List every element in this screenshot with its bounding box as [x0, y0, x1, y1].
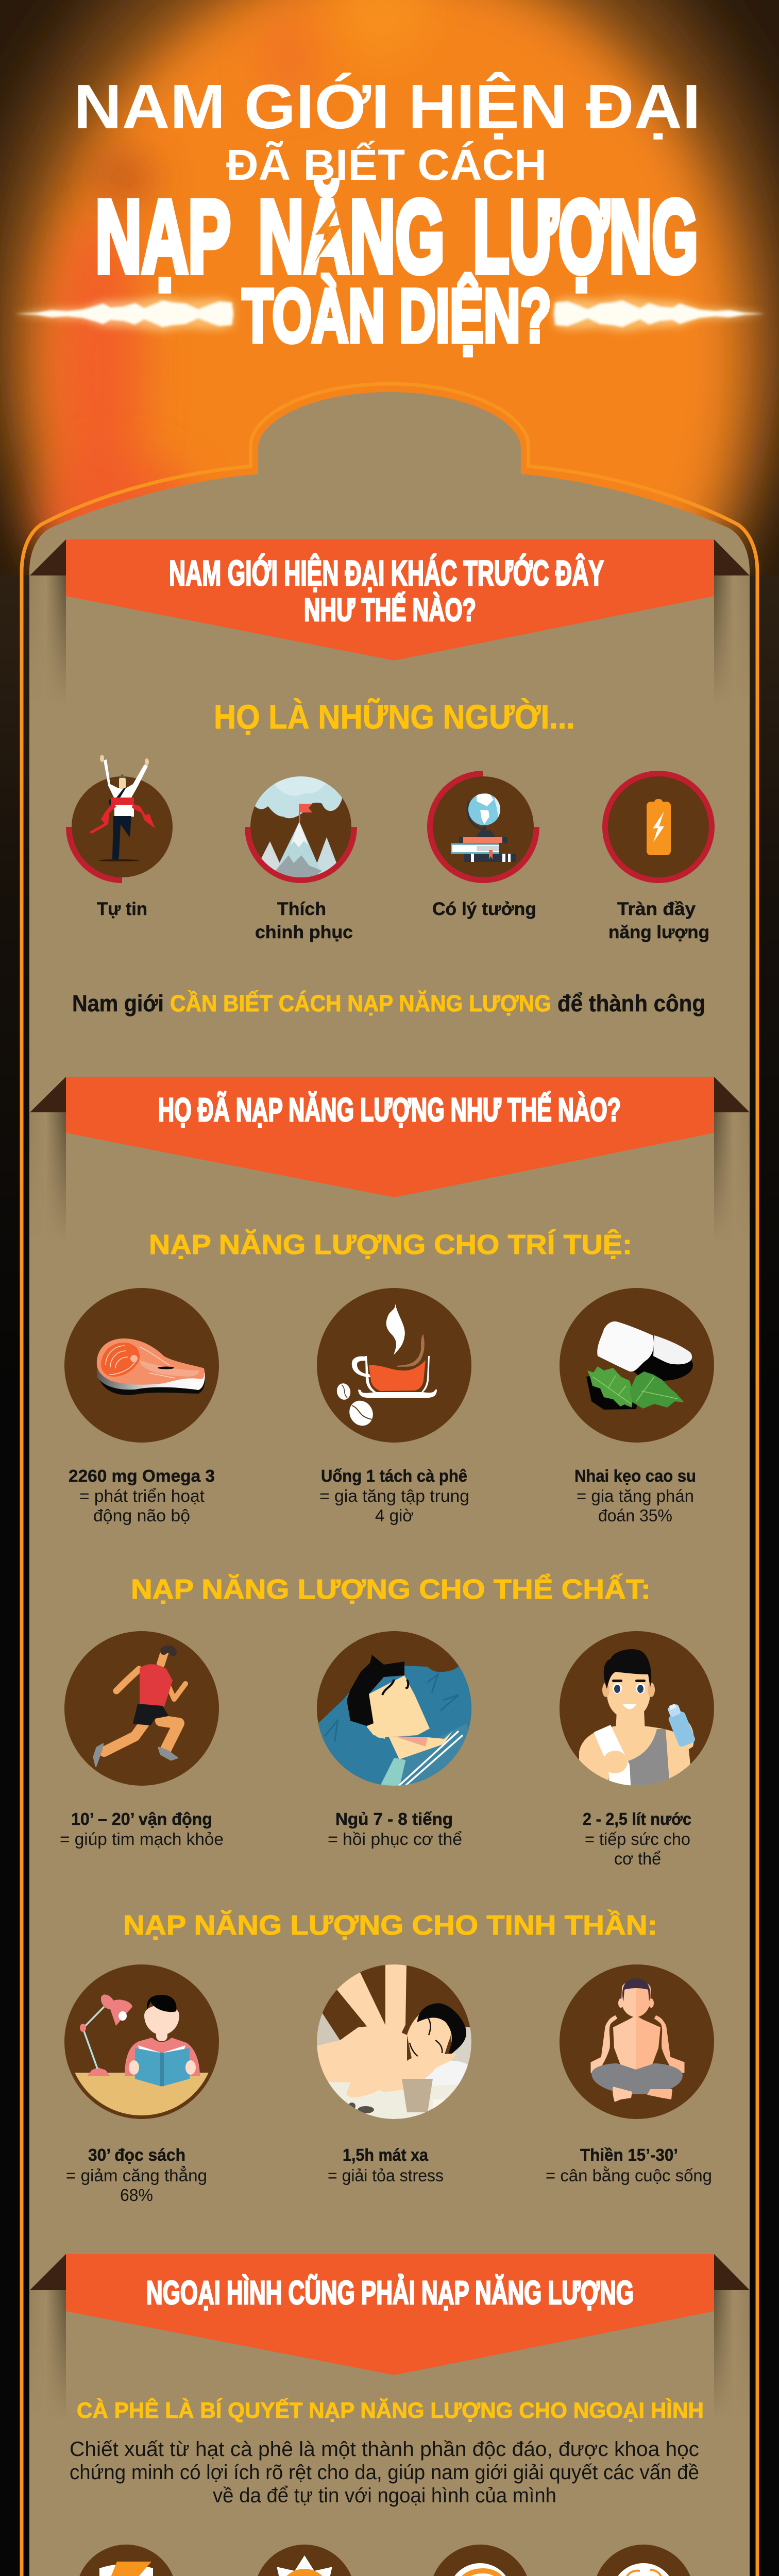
statement: CẦN BIẾT CÁCH NẠP NĂNG LƯỢNG [170, 990, 551, 1016]
title: TOÀN DIỆN? [242, 274, 551, 358]
item text: omega 3: 2260 mg Omega 3 [69, 1466, 215, 1485]
left light flare [15, 296, 233, 331]
item text: coffee [319, 1466, 469, 1525]
item: coffee [317, 1288, 471, 1443]
title: NẠP [95, 179, 231, 294]
title [74, 72, 701, 358]
item text: exercise: 10’ – 20’ vận động [71, 1809, 212, 1828]
item text: water: = tiếp sức cho [585, 1829, 690, 1849]
item text: sleep: = hồi phục cơ thể [328, 1829, 462, 1849]
icon: globe on books [451, 793, 516, 862]
item: massage [314, 1964, 479, 2123]
title: NAM GIỚI HIỆN ĐẠI [74, 72, 701, 142]
section 1 ribbon: NHƯ THẾ NÀO? [304, 592, 476, 628]
icon: coffee cup and beans [335, 1303, 437, 1430]
item text: water: cơ thể [614, 1849, 661, 1868]
statement [72, 990, 705, 1016]
item: exercise [64, 1631, 219, 1786]
paragraph: coffee extract: Chiết xuất từ hạt cà phê là một thành phần độc đáo, được khoa học [70, 2438, 699, 2461]
title: NĂNG [258, 179, 445, 294]
icon: man with water bottle [579, 1649, 696, 1793]
statement: để thành công [557, 990, 705, 1016]
item text: meditation [546, 2145, 712, 2185]
subheading: physical: NẠP NĂNG LƯỢNG CHO THỂ CHẤT: [131, 1574, 651, 1605]
item text: reading [66, 2145, 207, 2205]
icon: gauge [456, 2571, 507, 2576]
item: sleep [317, 1631, 471, 1786]
item text: chewing gum: = gia tăng phán [577, 1486, 694, 1505]
subheading: spirit: NẠP NĂNG LƯỢNG CHO TINH THẦN: [123, 1910, 657, 1941]
statement: Nam giới [72, 990, 164, 1016]
trait label: conquering [255, 899, 353, 942]
trait label: full of energy: năng lượng [608, 922, 709, 942]
item text: massage: = giải tỏa stress [328, 2166, 444, 2185]
icon: massage [314, 1964, 479, 2123]
icon: sun [265, 2555, 344, 2576]
item text: meditation: Thiền 15’-30’ [580, 2145, 678, 2164]
item text: chewing gum: Nhai kẹo cao su [574, 1466, 696, 1485]
item text: omega 3: = phát triển hoạt [79, 1486, 205, 1505]
item text: meditation: = cân bằng cuộc sống [546, 2166, 712, 2185]
icon: sleeping man [318, 1655, 471, 1786]
item text: omega 3 [69, 1466, 215, 1525]
subheading: coffee secret: CÀ PHÊ LÀ BÍ QUYẾT NẠP NĂNG LƯỢNG CHO NGOẠI HÌNH [77, 2398, 704, 2423]
trait label: full of energy [608, 899, 709, 942]
section 3 ribbon [29, 2254, 750, 2419]
trait: full of energy [605, 774, 712, 880]
item text: exercise [60, 1809, 224, 1849]
item: water [560, 1631, 714, 1793]
icon: lightning bolt in title [314, 200, 342, 263]
item text: chewing gum: đoán 35% [598, 1506, 672, 1525]
background: orange energy burst [0, 0, 779, 575]
subheading: intellect: NẠP NĂNG LƯỢNG CHO TRÍ TUỆ: [149, 1229, 632, 1260]
item text: water [583, 1809, 691, 1868]
icon: shield with bolt [99, 2562, 153, 2576]
benefit: anti-ageing [430, 2545, 531, 2576]
item text: exercise: = giúp tim mạch khỏe [60, 1829, 224, 1849]
page background [0, 575, 779, 2576]
icon: mountain peak with flag [255, 776, 342, 877]
section 1 ribbon [29, 539, 750, 704]
item text: omega 3: động não bộ [93, 1506, 190, 1525]
item text: massage: 1,5h mát xa [343, 2145, 429, 2164]
subheading: they are: HỌ LÀ NHỮNG NGƯỜI... [214, 698, 575, 736]
icon: smiling face [625, 2570, 662, 2576]
item: omega 3 [64, 1288, 219, 1443]
benefit: protection [76, 2545, 177, 2576]
benefit: recharge skin [593, 2545, 694, 2576]
item text: massage [328, 2145, 444, 2185]
trait label: conquering: Thích [277, 899, 326, 919]
icon: battery [647, 799, 671, 855]
trait label: full of energy: Tràn đầy [617, 899, 696, 919]
icon: salmon steak [97, 1338, 205, 1395]
item text: sleep [328, 1809, 462, 1849]
trait label: confident: Tự tin [97, 899, 147, 919]
item text: coffee: Uống 1 tách cà phê [321, 1466, 467, 1485]
item: reading [64, 1964, 219, 2124]
icon: man reading at desk [67, 1994, 216, 2124]
trait: idealistic [427, 771, 539, 883]
trait label: conquering: chinh phục [255, 922, 353, 942]
paragraph: coffee extract: chứng minh có lợi ích rõ rệt cho da, giúp nam giới giải quyết các vấn đề [70, 2461, 699, 2484]
item text: coffee: 4 giờ [375, 1506, 414, 1525]
section 2 ribbon [29, 1077, 750, 1241]
item text: reading: = giảm căng thẳng [66, 2166, 207, 2185]
benefit: uv [254, 2545, 355, 2576]
trait: conquering [245, 768, 357, 883]
item text: chewing gum [574, 1466, 696, 1525]
item: chewing gum [560, 1288, 714, 1443]
trait label: idealistic: Có lý tưởng [432, 899, 536, 919]
icon: meditating man [591, 1978, 683, 2102]
trait: confident [66, 755, 173, 883]
item text: coffee: = gia tăng tập trung [319, 1486, 469, 1505]
icon: runner [94, 1649, 185, 1766]
item text: sleep: Ngủ 7 - 8 tiếng [335, 1809, 453, 1828]
icon: gum and mint leaves [586, 1321, 693, 1410]
tan main panel [29, 392, 750, 2576]
title: ĐÃ BIẾT CÁCH [226, 141, 547, 189]
paragraph: coffee extract: về da để tự tin với ngoại hình của mình [213, 2484, 556, 2507]
item: meditation [560, 1964, 714, 2119]
item text: reading: 30’ đọc sách [88, 2145, 185, 2164]
icon: runner crossing finish line [89, 755, 155, 861]
item text: water: 2 - 2,5 lít nước [583, 1809, 691, 1828]
item text: reading: 68% [120, 2185, 153, 2205]
right light flare [554, 296, 765, 331]
paragraph: coffee extract [70, 2438, 699, 2507]
